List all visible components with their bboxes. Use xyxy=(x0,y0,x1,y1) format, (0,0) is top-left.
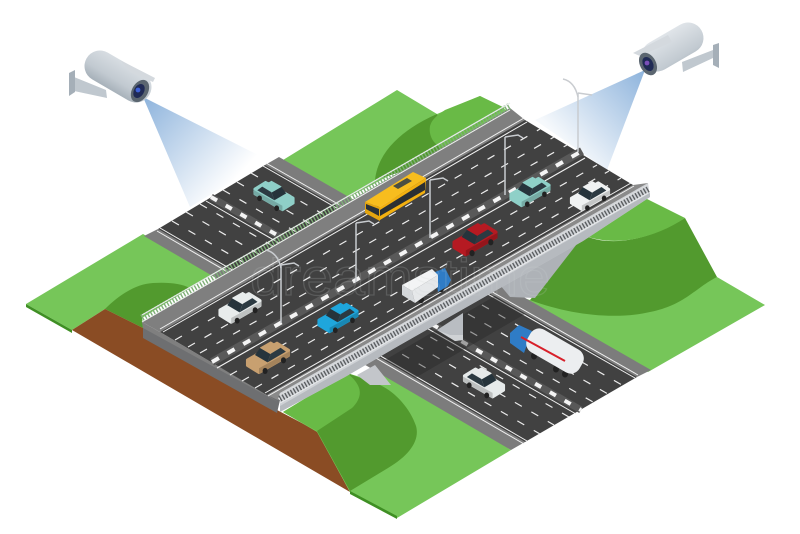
shoulder near xyxy=(267,183,648,400)
camera right bracket xyxy=(682,43,719,72)
ground: top green xyxy=(283,90,510,198)
tanker cab xyxy=(510,325,532,353)
bus windows xyxy=(380,182,425,216)
hill left dark xyxy=(105,283,190,328)
ground: right green xyxy=(495,197,765,372)
ground: bottom green xyxy=(283,365,511,519)
tanker stripe xyxy=(521,337,565,361)
camera right body xyxy=(657,38,688,56)
bus roof hatch xyxy=(393,178,412,189)
lamp 2 xyxy=(356,221,374,282)
bridge pillars xyxy=(357,240,580,385)
deck median barrier xyxy=(212,151,585,368)
lamp 1 xyxy=(266,250,299,323)
truck box xyxy=(402,269,438,303)
deck left edge xyxy=(142,322,278,402)
watermark: dreamstime xyxy=(250,249,550,307)
hill right lit xyxy=(583,197,685,241)
pillar left xyxy=(357,365,391,385)
tanker tank xyxy=(523,325,587,377)
earth cross-section xyxy=(72,309,350,492)
lamp 4 xyxy=(505,135,523,195)
camera left bracket xyxy=(69,70,107,98)
camera right lens xyxy=(635,50,661,78)
delivery truck xyxy=(402,268,451,303)
hill top lit xyxy=(430,96,505,148)
car: tan on deck xyxy=(247,342,290,374)
lower road asphalt xyxy=(158,165,637,442)
deck asphalt xyxy=(160,120,633,395)
overpass deck xyxy=(142,103,650,413)
car: white on lower road xyxy=(463,368,504,398)
car: white far right on deck xyxy=(571,182,610,211)
near railing xyxy=(280,185,648,403)
tanker wheels xyxy=(531,352,568,378)
hill right dark xyxy=(530,218,717,316)
lower road median xyxy=(206,197,581,414)
car: blue on deck xyxy=(319,303,359,333)
pillar right xyxy=(500,240,580,298)
camera left xyxy=(69,60,155,105)
car: red on deck xyxy=(454,223,498,256)
car: teal on deck xyxy=(511,177,551,207)
ground: left green xyxy=(26,234,213,333)
lower road lane markings xyxy=(172,173,622,434)
lower road verge far xyxy=(265,157,651,377)
car: white on deck xyxy=(220,292,262,324)
bus roof xyxy=(365,172,426,207)
shoulder far xyxy=(142,108,525,332)
camera left body xyxy=(100,66,136,87)
hill bottom lit xyxy=(283,373,360,431)
truck cab xyxy=(435,268,451,292)
far railing xyxy=(142,103,510,322)
lower road verge near xyxy=(144,229,525,450)
lamp 3 xyxy=(430,178,448,238)
camera right xyxy=(633,35,719,78)
lamp 5 xyxy=(563,79,592,152)
tanker truck xyxy=(510,325,587,378)
pillar middle xyxy=(437,313,463,341)
camera beam right xyxy=(535,70,645,170)
street lamps xyxy=(266,79,592,323)
hill bottom dark xyxy=(317,373,417,491)
hill top dark xyxy=(375,114,448,180)
camera beam left xyxy=(143,97,268,207)
deck lane markings xyxy=(175,129,621,388)
bus side xyxy=(380,178,426,220)
truck wheels xyxy=(418,286,444,303)
bus: yellow xyxy=(365,172,426,221)
camera left lens xyxy=(127,77,153,105)
shadow under bridge xyxy=(385,296,525,378)
deck side face xyxy=(143,326,280,413)
deck girder xyxy=(280,183,650,412)
car: teal on lower road xyxy=(253,181,293,211)
camera right hood xyxy=(633,35,672,56)
bus front xyxy=(365,202,380,221)
lower road xyxy=(144,157,651,450)
camera left hood xyxy=(120,60,155,82)
